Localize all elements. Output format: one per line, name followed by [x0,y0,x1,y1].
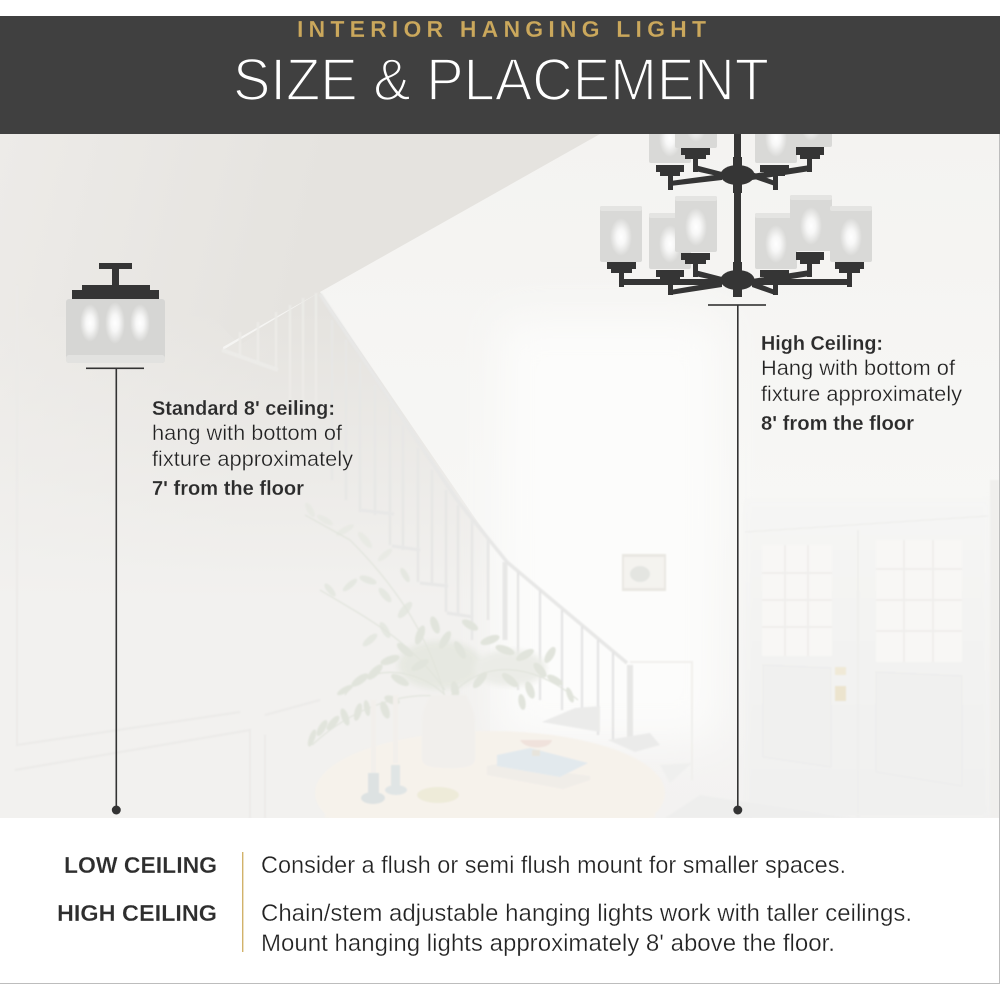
text block: standard ceiling [152,397,354,500]
left door window [762,545,832,656]
round table [490,732,638,762]
right edge moulding [992,500,994,506]
metal frame [607,134,864,297]
main stair rail [320,294,630,748]
mount [72,263,159,299]
low ceiling description: Consider a flush or semi flush mount for smaller spaces. [261,852,846,879]
high ceiling description: Chain/stem adjustable hanging lights work with taller ceilings. [261,900,912,927]
text block: high ceiling [761,332,963,435]
lower hub and arms [607,252,864,297]
text block: high ceiling: Hang with bottom of [761,357,955,380]
eyebrow heading: INTERIOR HANGING LIGHT [297,16,706,42]
main title: SIZE & PLACEMENT [233,47,769,113]
door hardware [835,667,846,675]
door panels [763,665,962,786]
ceiling plane [0,134,600,498]
right door window [876,540,962,662]
text block: standard ceiling: 7' from the floor [152,477,304,500]
shade [66,299,165,363]
icon: semi-flush fixture [66,263,165,363]
upper landing railing [224,309,290,350]
stair treads [544,706,596,731]
framed picture [622,554,666,591]
panel: ceiling guidance [0,818,1000,983]
candlesticks [361,695,407,804]
high ceiling description [261,900,912,957]
text block: standard ceiling: hang with bottom of [152,422,342,445]
small dish [417,787,459,803]
upper hub and arms [656,147,824,193]
text block: high ceiling: High Ceiling: [761,332,883,355]
wall base [223,134,999,818]
high ceiling description: Mount hanging lights approximately 8' above the floor. [261,930,835,957]
books and bowl [496,740,586,778]
lower tier shades [600,195,872,269]
floor [665,795,850,818]
plant branches and leaves [303,502,578,747]
label: high ceiling: HIGH CEILING [57,900,217,926]
text block: standard ceiling: Standard 8' ceiling: [152,397,335,420]
label: low ceiling: LOW CEILING [64,852,217,878]
staircase and room details [224,294,846,804]
wainscot line [630,661,693,730]
text block: standard ceiling: fixture approximately [152,448,354,471]
double doors [834,666,846,702]
icon: two-tier chandelier [600,134,872,297]
measure line: high ceiling [708,304,766,814]
measure line: standard ceiling [86,368,144,814]
text block: high ceiling: fixture approximately [761,383,963,406]
background photo: hallway with staircase [0,134,1000,855]
central stem [734,134,741,262]
gold divider [242,852,243,952]
wall panel mouldings [15,285,320,818]
central bright wall [530,372,689,711]
upper tier shades [649,134,832,163]
vase [432,695,458,698]
text block: high ceiling: 8' from the floor [761,412,914,435]
left wall fade [0,457,490,818]
header band [0,16,1000,134]
